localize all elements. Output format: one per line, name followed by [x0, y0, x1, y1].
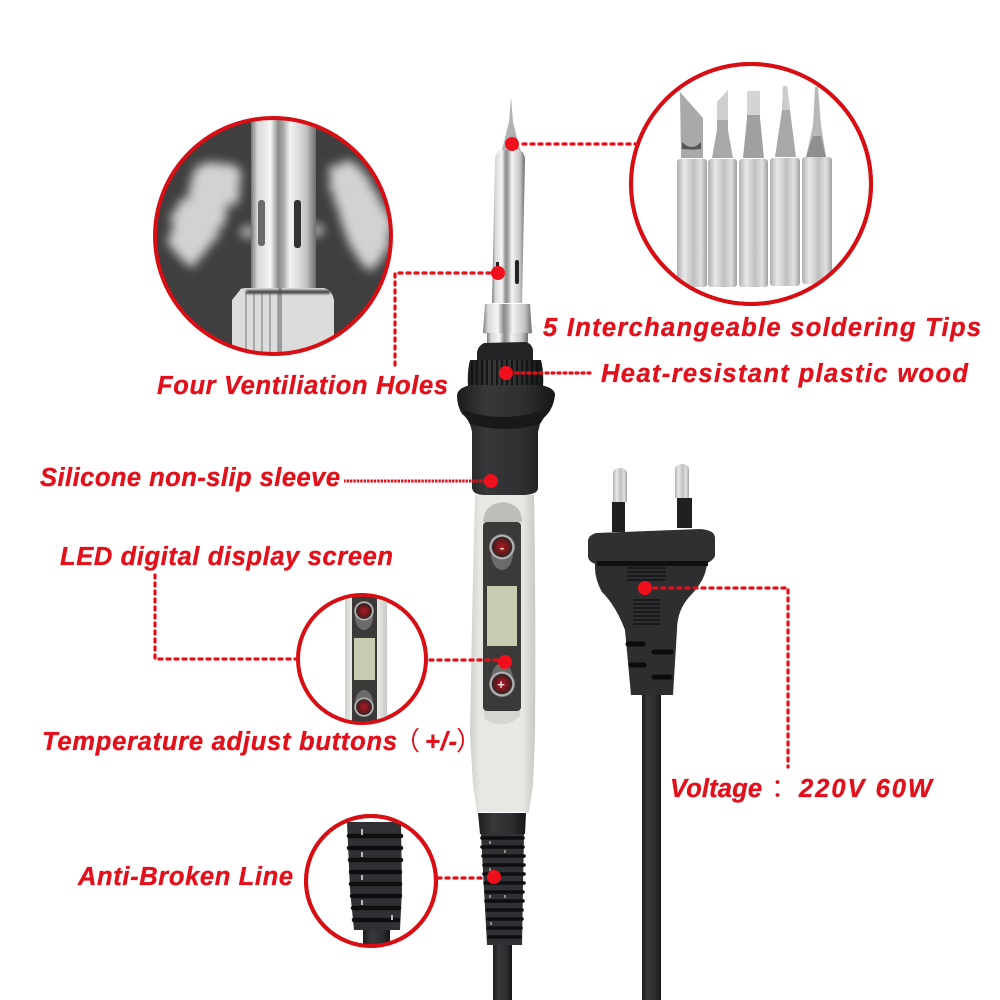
bevel tip	[708, 90, 737, 287]
leader: temperature buttons	[430, 658, 500, 662]
magnified LCD	[354, 638, 375, 680]
conical tip	[770, 86, 800, 286]
label: voltage	[670, 773, 934, 803]
magnified nut	[232, 288, 334, 356]
plug body	[595, 561, 708, 695]
heat-resistant knob	[468, 342, 543, 386]
minus button	[489, 534, 515, 570]
silicone sleeve	[457, 385, 555, 495]
fine tip	[802, 87, 832, 284]
label: temperature buttons: +/-	[425, 728, 457, 756]
label: LED: LED digital display screen	[60, 543, 393, 571]
label: voltage: Voltage	[670, 775, 762, 803]
metal barrel with vents	[492, 150, 525, 303]
magnified panel	[352, 596, 377, 722]
knurled nut	[483, 304, 532, 343]
plus button	[489, 663, 515, 697]
leader: anti-broken	[438, 876, 486, 880]
control panel	[483, 502, 522, 725]
plus button: +	[497, 677, 505, 692]
leader: tips	[523, 142, 636, 146]
magnified barrel	[251, 110, 316, 288]
LCD screen	[487, 586, 517, 646]
iron tip	[501, 97, 521, 153]
inset: ventilation holes	[155, 110, 392, 356]
label: temperature buttons: （	[394, 726, 420, 756]
label: plastic wood: Heat-resistant plastic wood	[601, 360, 969, 388]
soldering iron	[457, 97, 555, 1000]
flat tip	[739, 91, 768, 287]
inset: anti-broken line	[306, 816, 436, 950]
magnified cable	[363, 930, 390, 944]
label: sleeve: Silicone non-slip sleeve	[40, 464, 340, 492]
inset: LED display	[298, 590, 426, 730]
inset: five tips	[631, 64, 871, 304]
label: temperature buttons: Temperature adjust buttons	[42, 728, 397, 756]
power plug	[588, 464, 715, 1000]
leader: knob	[516, 371, 594, 375]
magnified boot	[347, 822, 402, 930]
label: holes: Four Ventiliation Holes	[157, 372, 448, 400]
label: tips: 5 Interchangeable soldering Tips	[543, 314, 981, 342]
magnified buttons	[354, 601, 374, 717]
vent slots	[258, 200, 265, 246]
strain relief boot	[478, 813, 526, 945]
plug cable	[642, 695, 661, 1000]
marker dots	[484, 137, 652, 884]
smoke	[168, 161, 392, 270]
white handle	[470, 495, 535, 812]
label: voltage: ：	[771, 773, 797, 803]
leader: plug	[654, 588, 788, 767]
label: temperature buttons: ）	[456, 726, 482, 756]
leader: sleeve	[344, 480, 485, 482]
label: voltage: 220V 60W	[798, 775, 934, 803]
minus button: -	[500, 540, 504, 555]
side vapour	[239, 222, 325, 240]
magnified handle	[345, 598, 387, 720]
label: anti-broken: Anti-Broken Line	[77, 863, 293, 891]
iron cable	[493, 945, 512, 1000]
plug plate	[588, 529, 715, 565]
leader: ventilation holes	[395, 273, 490, 370]
chisel tip	[677, 92, 707, 287]
leader: LED display	[155, 575, 298, 659]
plug pins	[612, 464, 692, 532]
